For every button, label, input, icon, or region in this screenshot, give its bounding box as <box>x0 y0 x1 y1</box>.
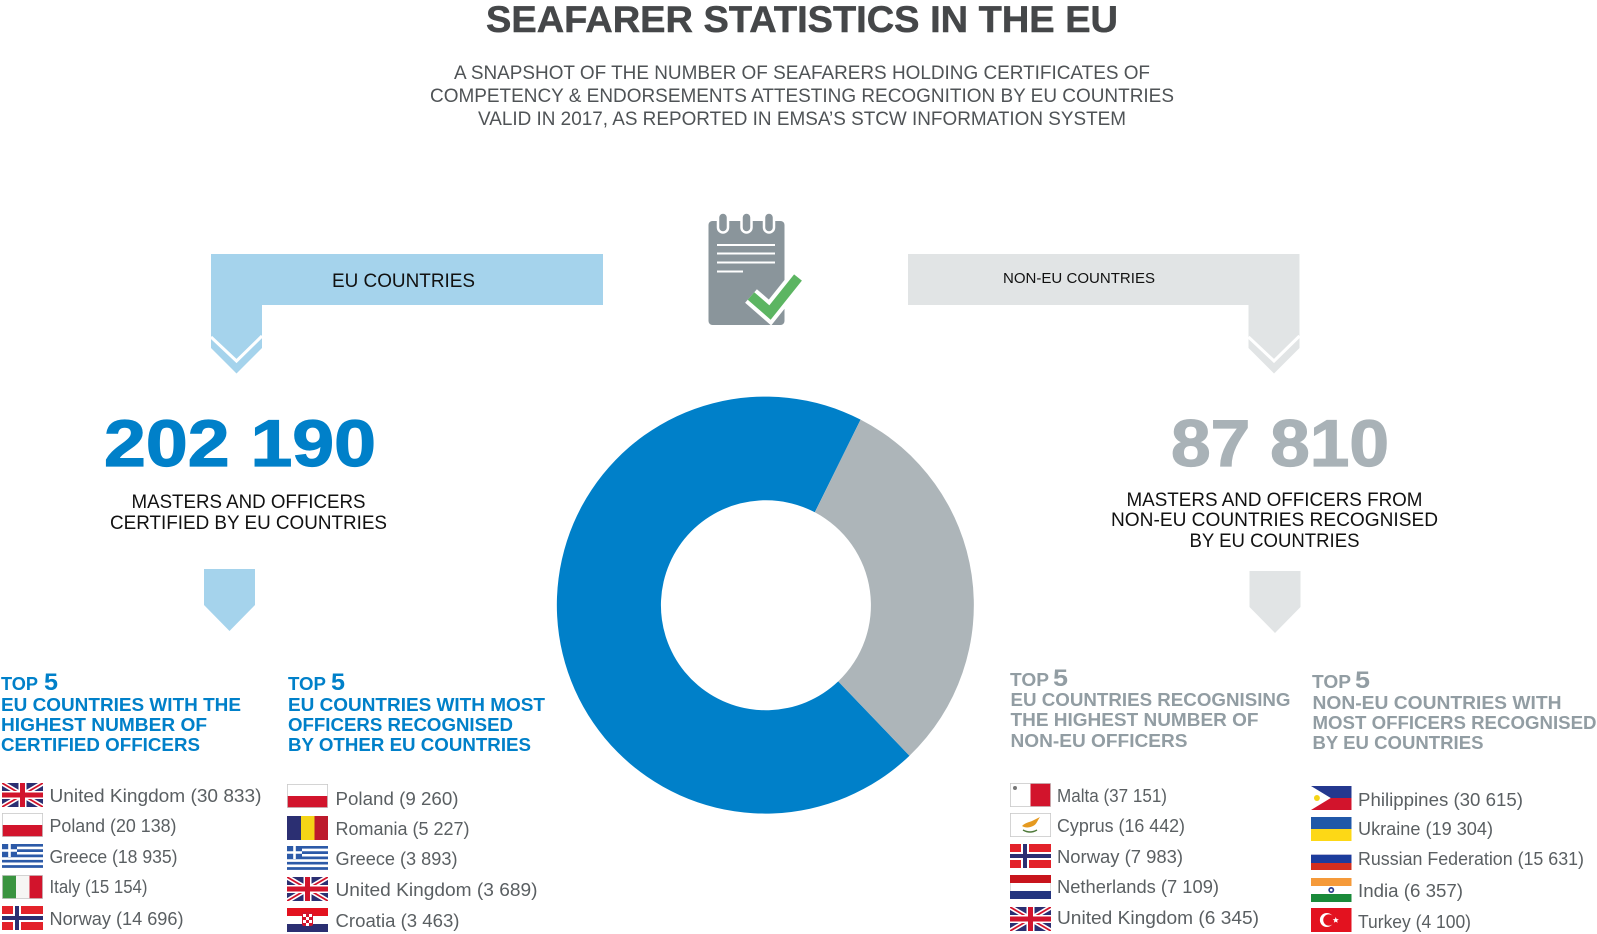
heading <box>1010 665 1290 751</box>
heading: TOP <box>1312 671 1351 692</box>
heading: TOP <box>1 673 38 694</box>
banner: non-EU countries <box>908 254 1300 374</box>
heading: CERTIFIED OFFICERS <box>1 734 200 755</box>
heading: BY OTHER EU COUNTRIES <box>288 734 531 755</box>
row: United Kingdom: United Kingdom (3 689) <box>336 879 538 900</box>
row: Turkey <box>1311 908 1471 932</box>
heading: NON-EU OFFICERS <box>1010 730 1188 751</box>
row: United Kingdom <box>1010 907 1259 931</box>
row: Norway <box>1010 844 1183 868</box>
row: Turkey: Turkey (4 100) <box>1358 911 1471 932</box>
row: Greece: Greece (3 893) <box>336 848 458 869</box>
row: Cyprus: Cyprus (16 442) <box>1057 815 1185 836</box>
row: Netherlands <box>1010 875 1219 899</box>
row: Norway: Norway (7 983) <box>1057 846 1183 867</box>
panel: top 5 EU officers recognised by other EU countries <box>287 669 546 932</box>
heading: EU COUNTRIES RECOGNISING <box>1010 689 1290 710</box>
row: Croatia <box>287 908 460 932</box>
row: Russian Federation: Russian Federation (15 631) <box>1358 848 1584 869</box>
row: Ukraine: Ukraine (19 304) <box>1358 818 1493 839</box>
icon: notepad with check mark <box>708 212 798 325</box>
heading: TOP <box>1010 669 1049 690</box>
row: Malta: Malta (37 151) <box>1057 785 1167 806</box>
heading <box>288 669 546 755</box>
row: Cyprus <box>1010 813 1185 837</box>
row: Malta <box>1010 783 1167 807</box>
row: Norway: Norway (14 696) <box>50 908 184 929</box>
panel: top 5 EU countries recognising non-EU officers <box>1010 665 1290 931</box>
row: Croatia: Croatia (3 463) <box>336 910 460 931</box>
heading: 5 <box>1053 665 1068 692</box>
title: SEAFARER STATISTICS IN THE EU <box>486 0 1118 40</box>
row: Netherlands: Netherlands (7 109) <box>1057 876 1219 897</box>
row: United Kingdom: United Kingdom (6 345) <box>1057 907 1259 928</box>
arrow: non-EU down <box>1250 571 1300 633</box>
heading <box>1312 667 1596 753</box>
heading: NON-EU COUNTRIES WITH <box>1312 692 1562 713</box>
row: Poland <box>287 784 458 809</box>
row: Philippines: Philippines (30 615) <box>1358 789 1523 810</box>
banner: non-EU countries: NON-EU COUNTRIES <box>1003 270 1155 287</box>
row: United Kingdom <box>2 783 262 807</box>
row: Poland <box>2 813 176 837</box>
non-EU total <box>1111 406 1438 552</box>
heading: THE HIGHEST NUMBER OF <box>1010 709 1258 730</box>
heading: BY EU COUNTRIES <box>1312 732 1484 753</box>
row: India <box>1311 878 1463 902</box>
heading: TOP <box>288 673 326 694</box>
subtitle <box>430 63 1174 130</box>
row: Greece <box>2 844 178 868</box>
non-EU total: BY EU COUNTRIES <box>1190 530 1360 552</box>
non-EU total: MASTERS AND OFFICERS FROM <box>1126 489 1422 511</box>
heading: OFFICERS RECOGNISED <box>288 714 513 735</box>
row: Poland: Poland (9 260) <box>336 788 458 809</box>
row: Poland: Poland (20 138) <box>50 815 176 836</box>
row: United Kingdom: United Kingdom (30 833) <box>50 785 262 806</box>
row: Italy <box>2 875 148 899</box>
heading: MOST OFFICERS RECOGNISED <box>1312 712 1596 733</box>
row: Greece <box>287 846 458 870</box>
row: Italy: Italy (15 154) <box>50 876 148 897</box>
subtitle: A SNAPSHOT OF THE NUMBER OF SEAFARERS HOLDING CERTIFICATES OF <box>454 63 1150 84</box>
row: Norway <box>2 906 184 930</box>
subtitle: COMPETENCY & ENDORSEMENTS ATTESTING RECOGNITION BY EU COUNTRIES <box>430 86 1174 107</box>
EU total <box>104 406 387 534</box>
row: India: India (6 357) <box>1358 880 1463 901</box>
heading <box>1 669 241 755</box>
heading: 5 <box>331 669 345 696</box>
donut chart <box>557 397 974 814</box>
row: Romania <box>287 816 470 840</box>
row: United Kingdom <box>287 877 538 901</box>
panel: top 5 non-EU countries with most officers recognised <box>1311 667 1596 932</box>
heading: EU COUNTRIES WITH THE <box>1 694 241 715</box>
row: Romania: Romania (5 227) <box>336 818 470 839</box>
panel: top 5 EU certified officers <box>1 669 262 930</box>
heading: 5 <box>44 669 58 696</box>
non-EU total: 87 810 <box>1171 406 1389 480</box>
EU total: MASTERS AND OFFICERS <box>132 491 366 513</box>
row: Greece: Greece (18 935) <box>50 846 178 867</box>
banner: EU countries: EU COUNTRIES <box>332 271 475 292</box>
EU total: CERTIFIED BY EU COUNTRIES <box>110 512 387 534</box>
heading: HIGHEST NUMBER OF <box>1 714 207 735</box>
row: Ukraine <box>1311 817 1493 841</box>
arrow: EU down <box>204 569 255 631</box>
non-EU total: NON-EU COUNTRIES RECOGNISED <box>1111 509 1438 531</box>
heading: 5 <box>1355 667 1370 694</box>
subtitle: VALID IN 2017, AS REPORTED IN EMSA’S STCW INFORMATION SYSTEM <box>478 109 1126 130</box>
heading: EU COUNTRIES WITH MOST <box>288 694 546 715</box>
EU total: 202 190 <box>104 406 376 480</box>
row: Philippines <box>1311 786 1523 810</box>
banner: EU countries <box>211 254 603 374</box>
